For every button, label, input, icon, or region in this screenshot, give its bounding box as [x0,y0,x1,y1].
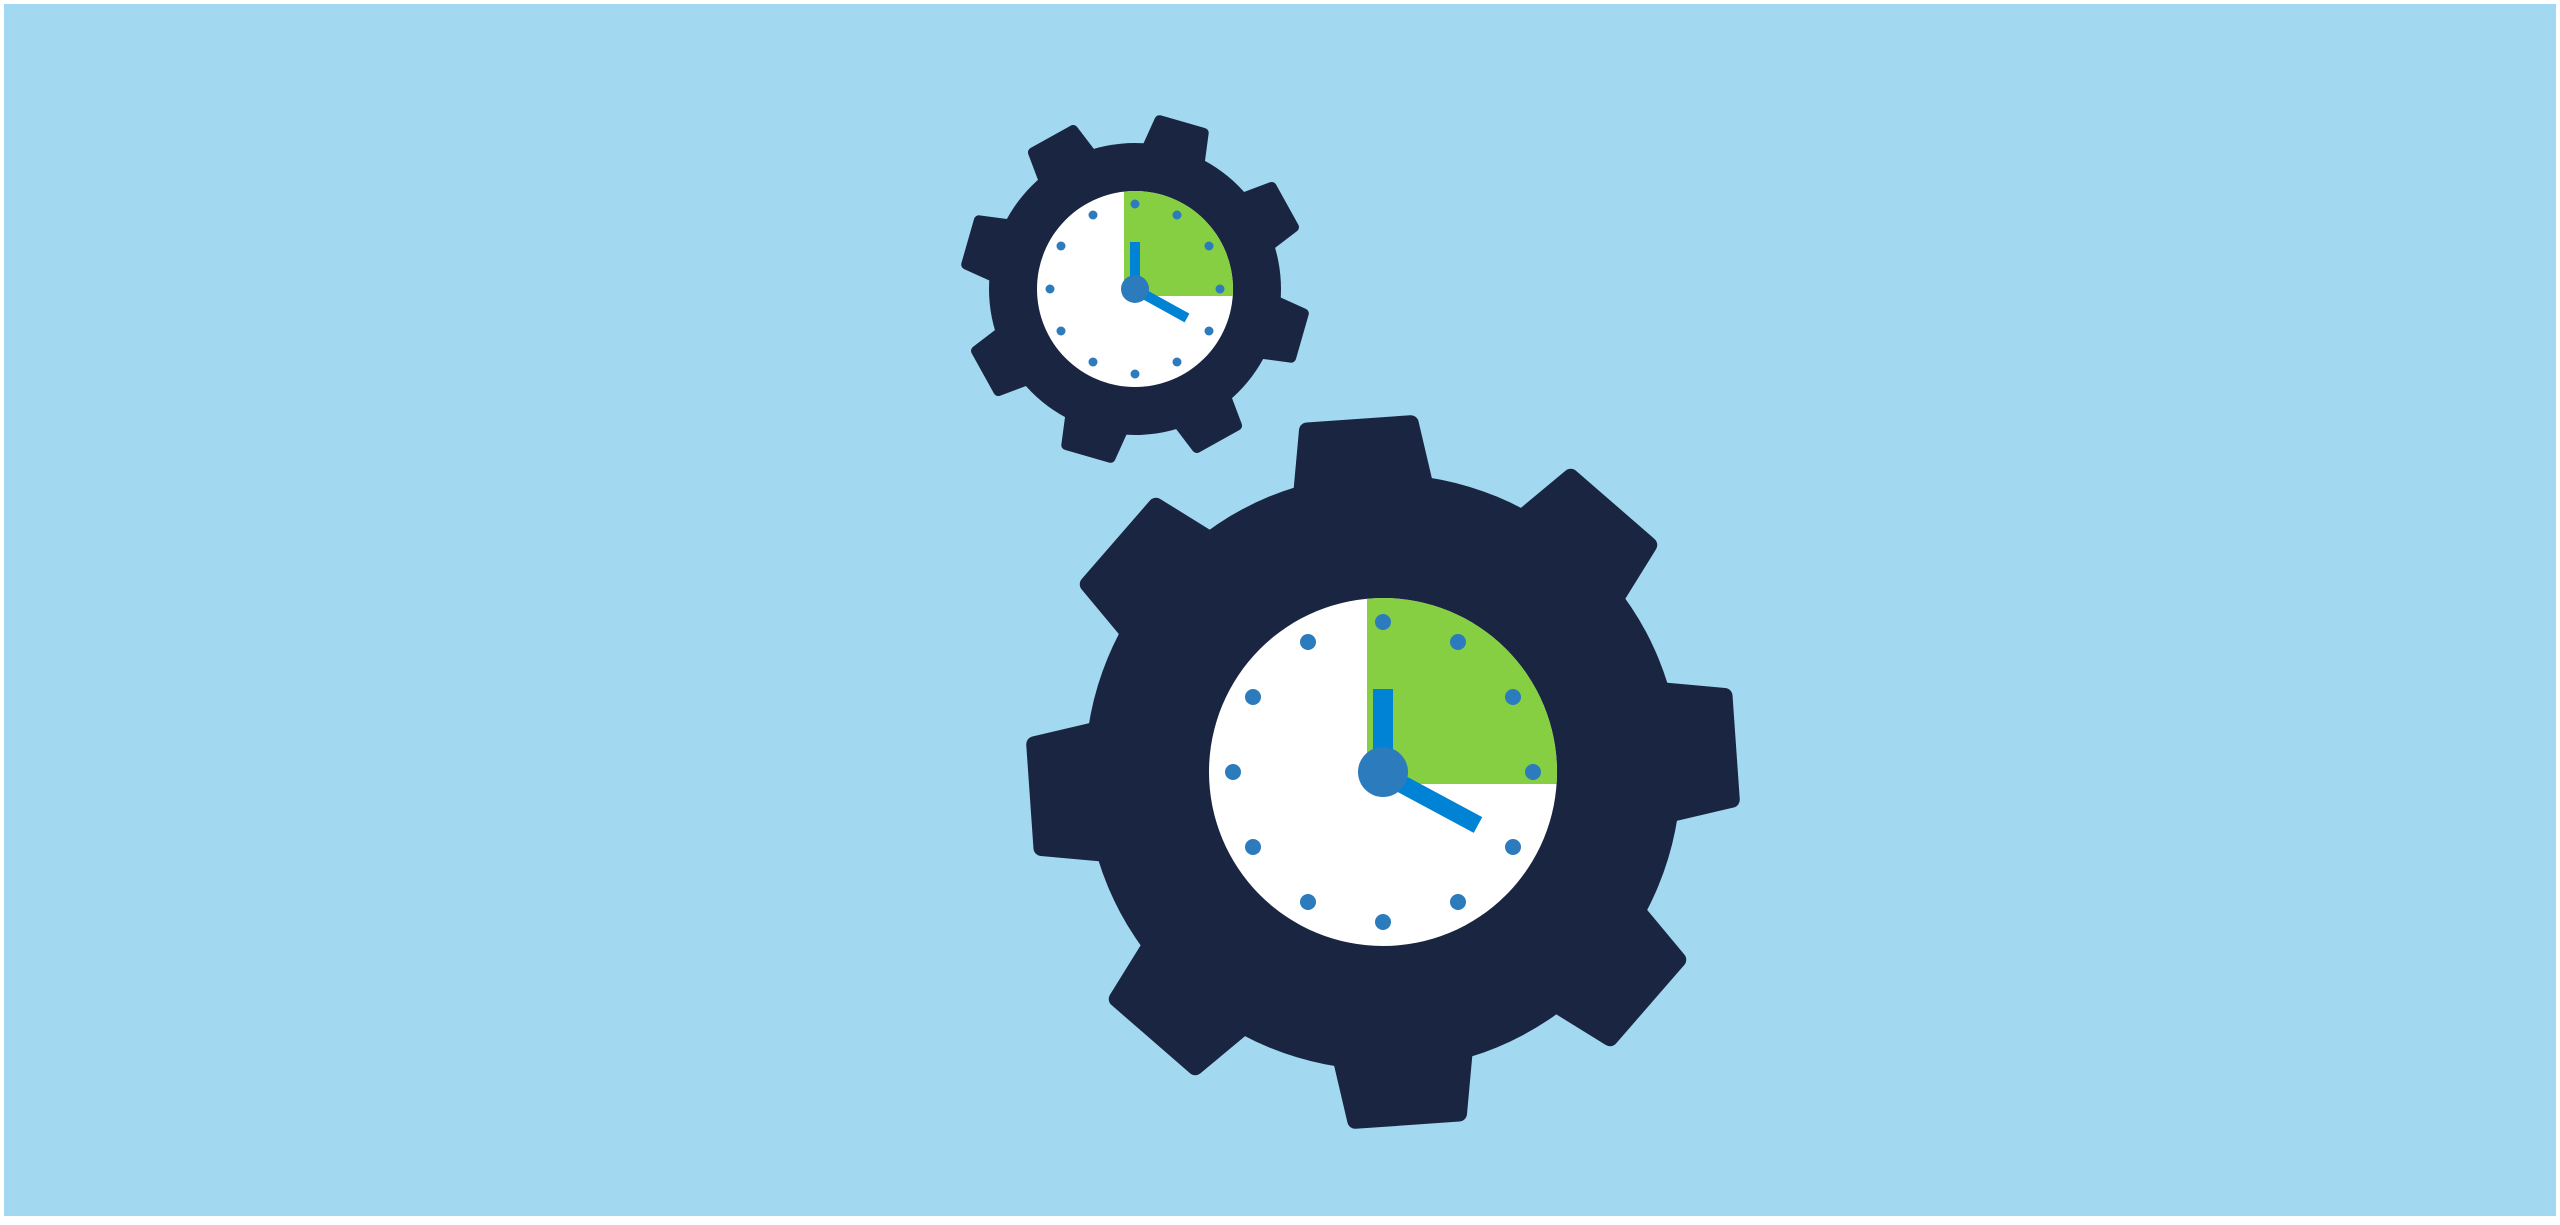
large gear body [1033,422,1733,1122]
small clock face [1037,191,1233,387]
small gear with clock [965,119,1305,459]
minute hand [1398,782,1478,825]
hour hand [1373,689,1393,751]
small gear body [965,119,1305,459]
center dot [1358,747,1408,797]
large gear with clock [1033,422,1733,1122]
large clock face [1209,590,1567,946]
